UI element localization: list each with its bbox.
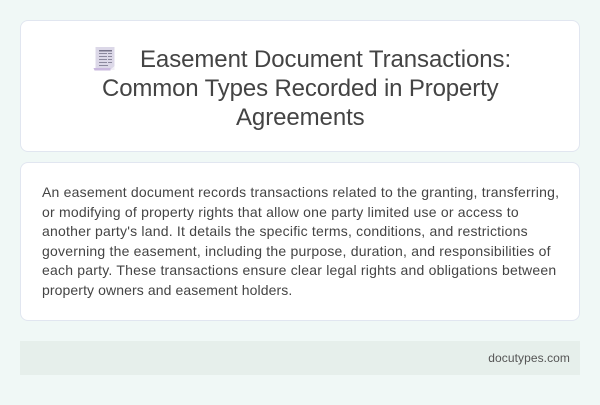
footer text: docutypes.com bbox=[488, 351, 570, 365]
title bbox=[102, 46, 511, 131]
title: Common Types Recorded in Property bbox=[102, 75, 498, 102]
panel: description card bbox=[20, 162, 580, 321]
title: Agreements bbox=[236, 104, 365, 131]
title: Easement Document Transactions: bbox=[140, 46, 511, 73]
text block: description: another party's land. It details the specific terms, conditions, and restrictions bbox=[42, 223, 528, 239]
text block: description bbox=[42, 184, 559, 298]
text block: description: or modifying of property rights that allow one party limited use or access to bbox=[42, 204, 519, 220]
text block: description: An easement document records transactions related to the granting, transferring, bbox=[42, 184, 559, 200]
footer bar bbox=[20, 341, 580, 375]
text block: description: governing the easement, including the purpose, duration, and responsibilities of bbox=[42, 243, 551, 259]
panel: title card bbox=[20, 20, 580, 152]
text block: description: property owners and easement holders. bbox=[42, 282, 292, 298]
text block: description: each party. These transactions ensure clear legal rights and obligations between bbox=[42, 262, 556, 278]
icon: document scroll bbox=[94, 47, 114, 70]
